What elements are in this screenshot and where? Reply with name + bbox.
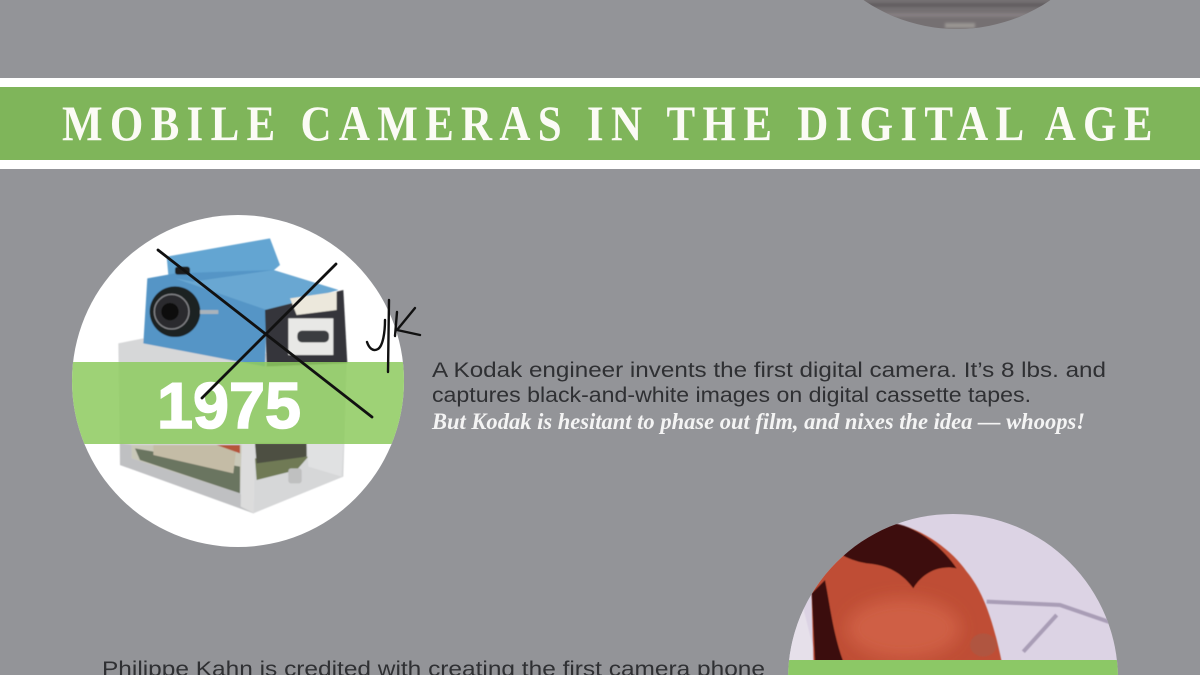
green year band: [780, 660, 1125, 675]
icon: Kodak digital camera prototype: [118, 238, 347, 513]
1975 description: But Kodak is hesitant to phase out film, and nixes the idea — whoops!: [431, 409, 1085, 434]
year label: 1975: [157, 369, 301, 442]
section heading banner: [0, 78, 1200, 169]
camera phone photo circle: newborn: [780, 505, 1125, 675]
heading text: MOBILE CAMERAS IN THE DIGITAL AGE: [62, 96, 1152, 152]
hand-written JK note: [367, 300, 420, 372]
1975 circle: first digital camera: [70, 215, 420, 547]
previous section photo circle: [864, 0, 1050, 29]
green year band: [70, 362, 406, 444]
1975 description: A Kodak engineer invents the first digital camera. It’s 8 lbs. and: [432, 359, 1106, 382]
hand-drawn cross: [158, 250, 372, 417]
1975 description: [431, 359, 1106, 434]
1975 description: captures black-and-white images on digital cassette tapes.: [432, 384, 1031, 407]
photo: baby's head: [783, 523, 1113, 662]
